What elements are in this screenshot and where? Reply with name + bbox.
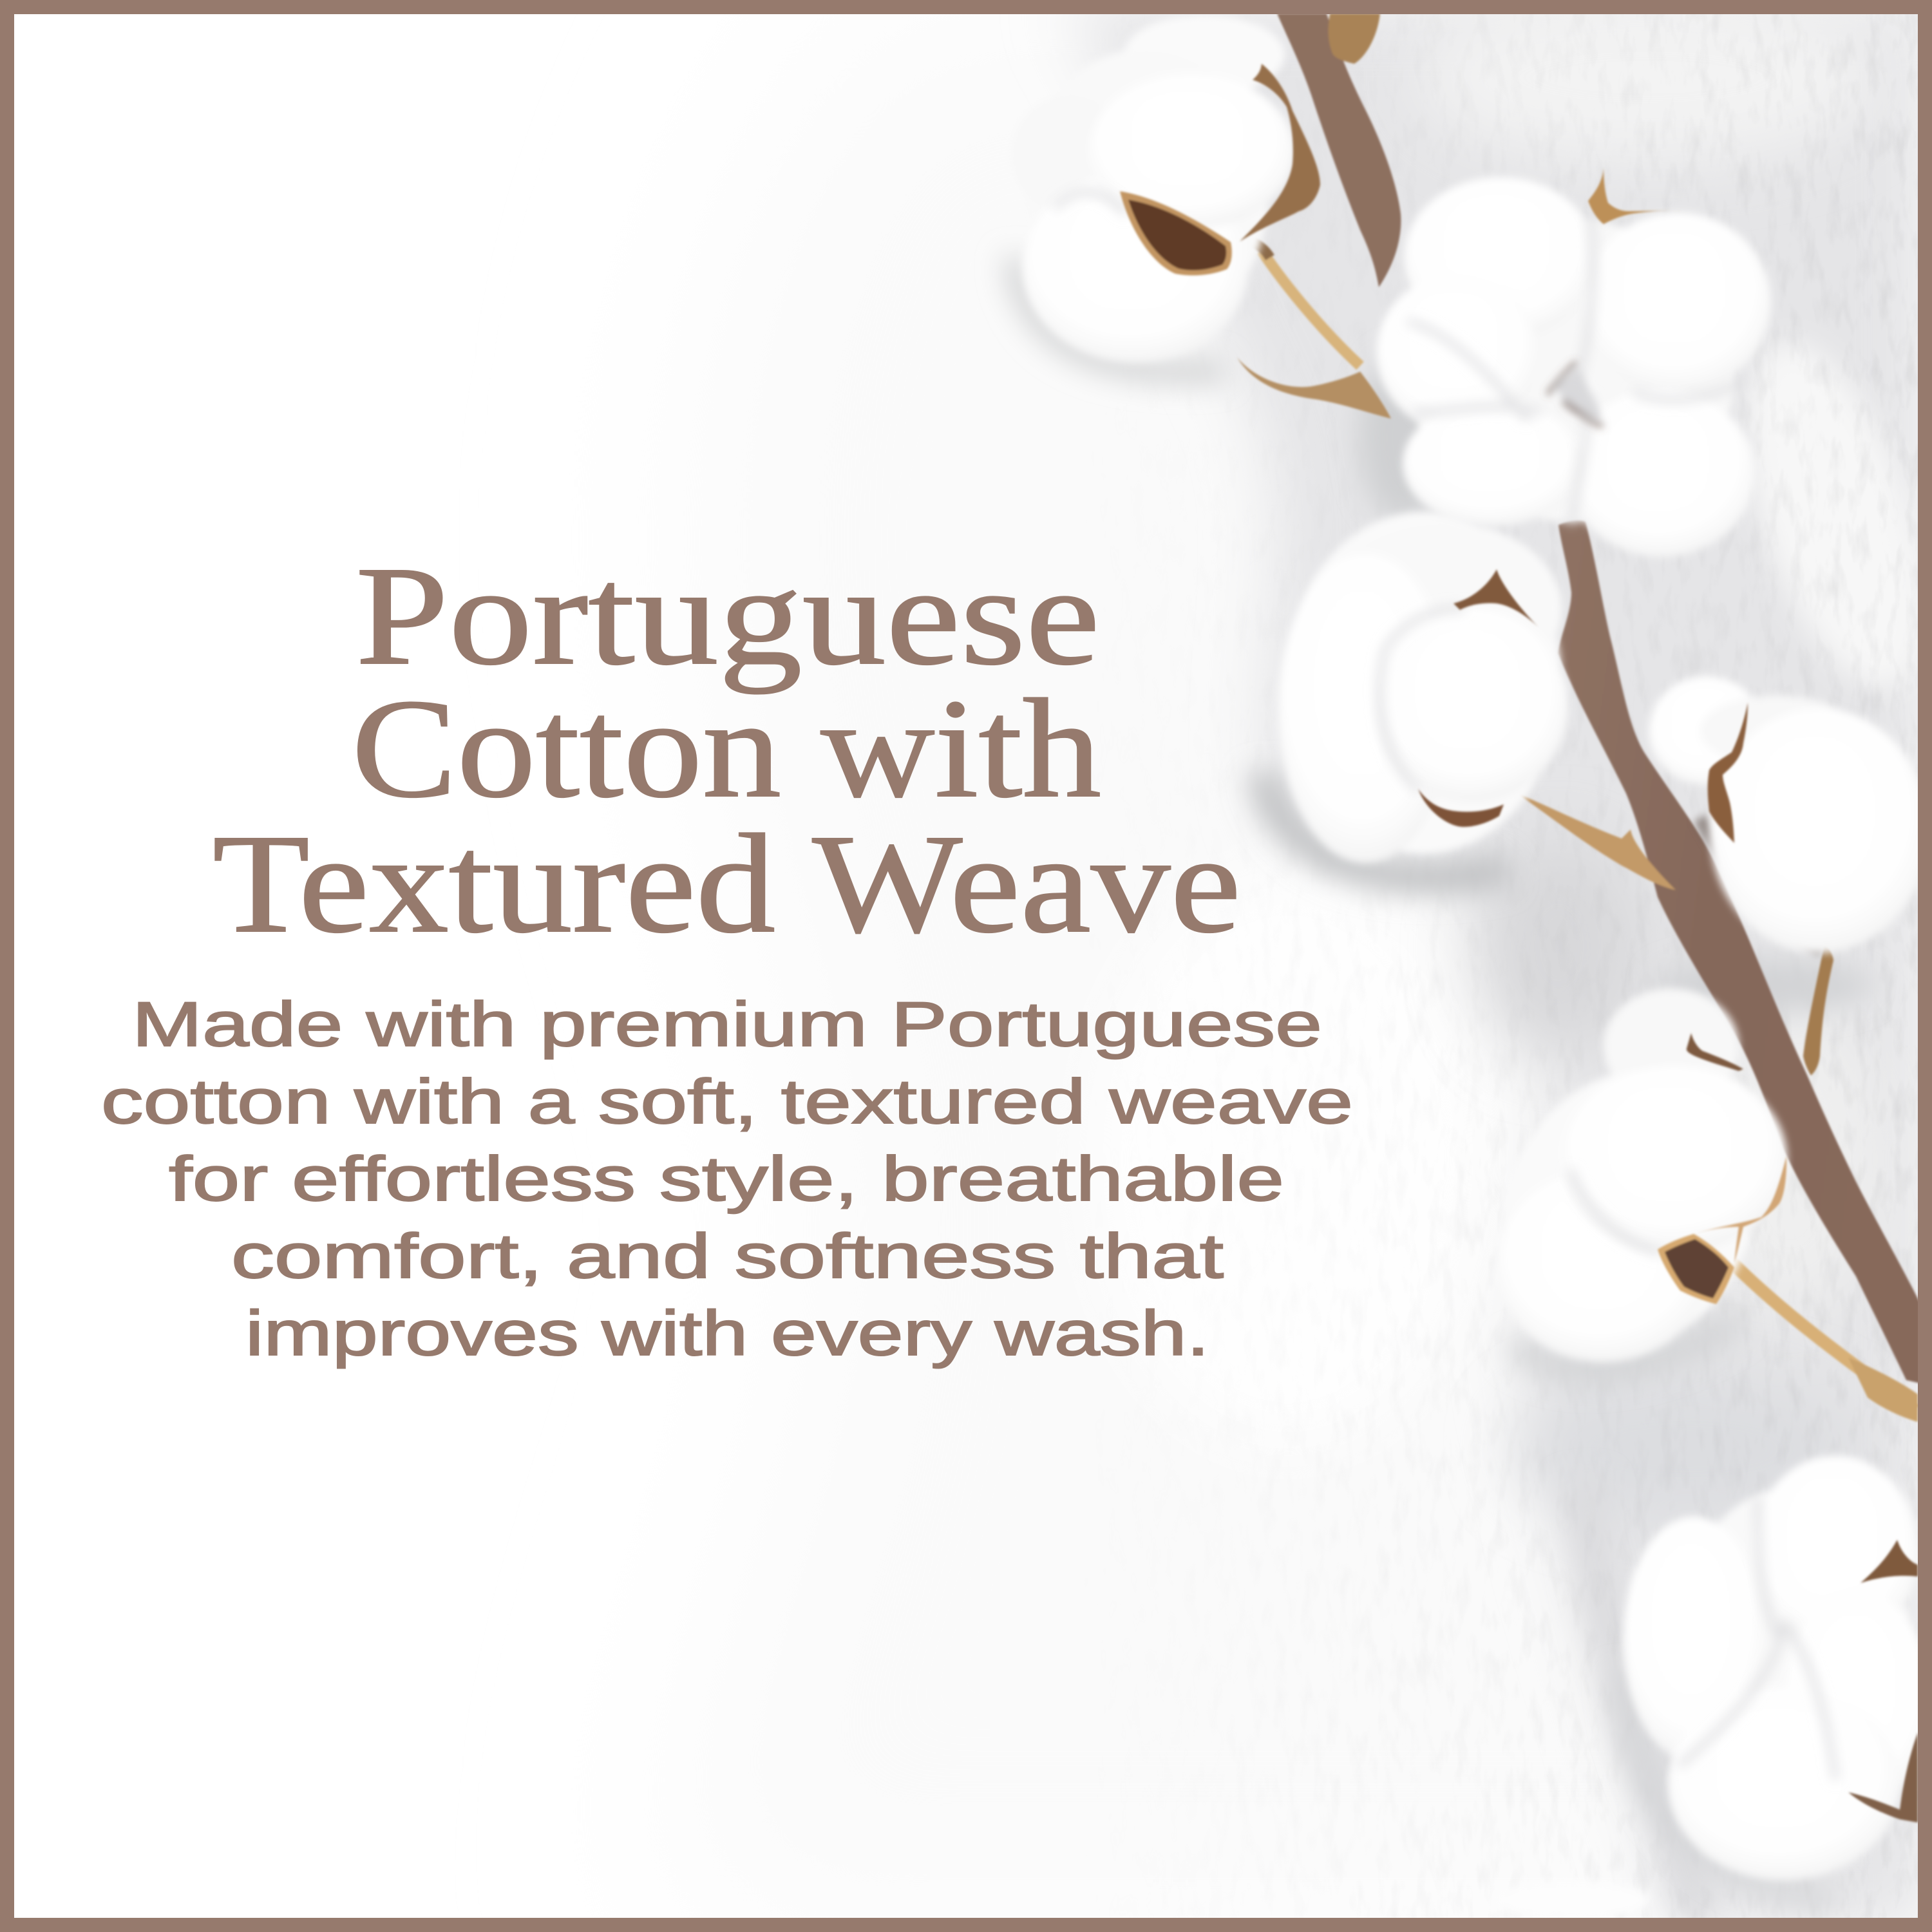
title: Textured Weave [213, 805, 1241, 962]
title: Cotton with [352, 670, 1101, 827]
cotton boll: middle left [1278, 512, 1568, 863]
cotton boll: right [1649, 676, 1929, 953]
cotton cluster centre: dark dried fibres [1549, 364, 1602, 425]
body text: improves with every wash. [245, 1298, 1209, 1368]
photo: cotton on textured fabric [989, 14, 1918, 1918]
body text: comfort, and softness that [231, 1220, 1224, 1291]
husk: grey dried edge of right boll [1700, 818, 1823, 950]
boll lobe seams [1056, 192, 1835, 1777]
body text: Made with premium Portuguese [132, 989, 1322, 1059]
title [213, 537, 1241, 962]
fabric background [1063, 14, 1918, 1918]
title: Portuguese [355, 537, 1100, 694]
body text: for effortless style, breathable [169, 1143, 1284, 1214]
body text [101, 989, 1353, 1368]
cotton boll: top left [1011, 15, 1294, 363]
twig: yellow stems [1237, 240, 1918, 1422]
body text: cotton with a soft, textured weave [101, 1066, 1353, 1137]
twig: small right twig [1803, 945, 1833, 1075]
cotton boll: bottom right [1494, 1455, 1932, 1918]
stem: upper branch [1277, 14, 1401, 287]
cotton boll: top center cluster [1376, 177, 1771, 557]
boll shadows [1014, 258, 1874, 1900]
twig: left side tan twig [1517, 793, 1676, 890]
stem: main branch [1517, 520, 1926, 1385]
husks and seed pods [1120, 64, 1918, 1823]
cotton boll: lower middle [1457, 989, 1801, 1394]
